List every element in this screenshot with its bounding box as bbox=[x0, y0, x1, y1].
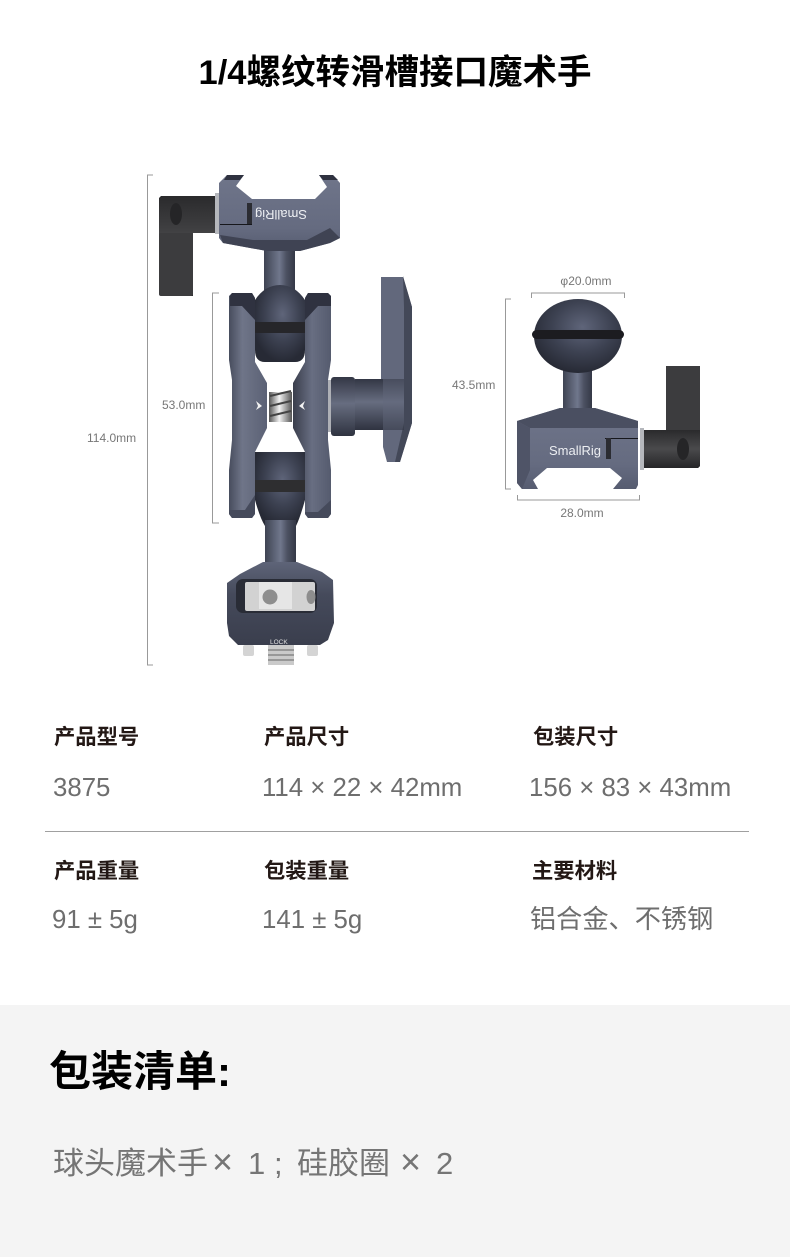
arm shading bbox=[229, 293, 331, 518]
dimension: 114.0mm height: 114.0mm bbox=[87, 431, 136, 445]
locking knob bbox=[159, 193, 221, 296]
dimension: 53.0mm arm length: 53.0mm bbox=[162, 398, 205, 412]
lock label: LOCK bbox=[270, 639, 288, 646]
spec: package weight: 141 ± 5g bbox=[262, 906, 362, 934]
package list heading: 包装清单: bbox=[49, 1048, 231, 1095]
bottom lock clamp bbox=[227, 562, 334, 646]
title: 1/4螺纹转滑槽接口魔术手 bbox=[199, 54, 591, 92]
dimension: 114.0mm height bbox=[87, 175, 153, 665]
spec: package size bbox=[529, 725, 731, 802]
spring bbox=[269, 391, 292, 422]
package list contents: 球头魔术手 bbox=[53, 1146, 208, 1181]
arm pivot knob and mounting plate bbox=[327, 276, 412, 462]
clamp logo (mirrored): SmallRig bbox=[255, 207, 307, 222]
product: side view of ball head bbox=[452, 274, 700, 520]
package list contents: ; bbox=[274, 1146, 283, 1181]
ball bbox=[534, 299, 622, 373]
spec: material bbox=[530, 859, 713, 934]
dimension: 43.5mm: 43.5mm bbox=[452, 378, 495, 392]
spec: material: 主要材料 bbox=[532, 859, 617, 883]
spec: package size: 包装尺寸 bbox=[533, 725, 618, 749]
right arm bbox=[293, 293, 331, 518]
spec: product size: 114 × 22 × 42mm bbox=[262, 774, 462, 802]
spec: product size bbox=[262, 725, 462, 802]
neck bbox=[563, 365, 592, 415]
package list contents: × bbox=[212, 1141, 233, 1182]
package list contents: 2 bbox=[436, 1146, 453, 1181]
arrow marks bbox=[256, 401, 305, 410]
spec: package weight bbox=[262, 859, 362, 934]
spec: material: 铝合金、不锈钢 bbox=[530, 904, 713, 934]
package list contents: × bbox=[400, 1141, 421, 1182]
dimension: φ20.0mm bbox=[532, 274, 624, 298]
spec: model bbox=[53, 725, 139, 802]
spec: package size: 156 × 83 × 43mm bbox=[529, 774, 731, 802]
dimension: 28.0mm bbox=[518, 495, 640, 520]
spec: package weight: 包装重量 bbox=[264, 859, 349, 883]
spec: model: 产品型号 bbox=[54, 725, 139, 749]
rubber ring bbox=[532, 330, 624, 339]
top slide clamp bbox=[219, 175, 340, 251]
lower neck bbox=[265, 520, 296, 566]
dimension: φ20.0mm: φ20.0mm bbox=[560, 274, 612, 288]
thread screw and pins bbox=[243, 645, 318, 665]
spec: product weight bbox=[52, 859, 139, 934]
spec: product weight: 产品重量 bbox=[54, 859, 139, 883]
dimension: 43.5mm bbox=[452, 299, 511, 489]
spec table bbox=[45, 725, 749, 934]
upper neck bbox=[264, 250, 295, 295]
dimension: 28.0mm: 28.0mm bbox=[560, 506, 604, 520]
left arm bbox=[229, 293, 267, 518]
package list contents: 1 bbox=[248, 1146, 265, 1181]
panel: package list bbox=[0, 1005, 790, 1257]
slide clamp bbox=[517, 408, 638, 489]
knob bbox=[640, 366, 700, 470]
lower ball bbox=[255, 452, 305, 526]
dimension: 53.0mm arm length bbox=[162, 293, 219, 523]
product: front view of ball head magic arm bbox=[87, 175, 412, 665]
spec: model: 3875 bbox=[53, 774, 110, 802]
package list contents: 硅胶圈 bbox=[297, 1146, 390, 1181]
upper ball bbox=[255, 285, 305, 362]
clamp logo: SmallRig bbox=[549, 443, 601, 458]
spec: product weight: 91 ± 5g bbox=[52, 906, 138, 934]
spec: product size: 产品尺寸 bbox=[264, 725, 349, 749]
